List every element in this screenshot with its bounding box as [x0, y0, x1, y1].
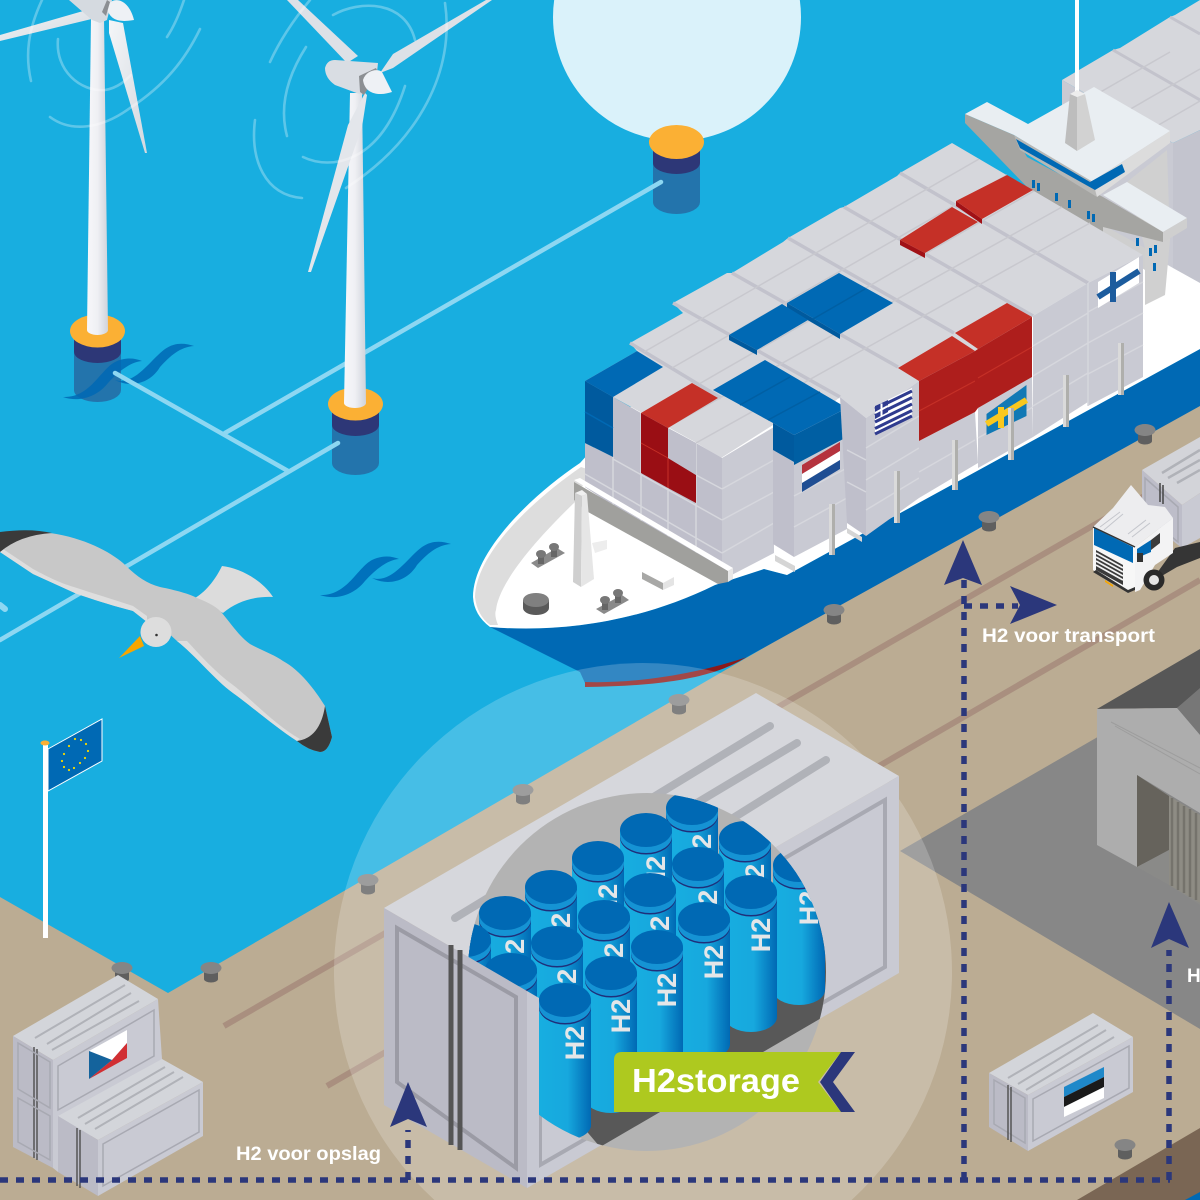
turbine foundations	[70, 125, 704, 475]
hydrogen cylinders: H2	[593, 884, 623, 918]
Finnish flag towers	[1033, 255, 1143, 437]
front tower group	[585, 351, 774, 580]
flag: Greece	[875, 388, 912, 435]
waves near ship	[320, 542, 451, 597]
stars	[61, 738, 89, 771]
hydrogen cylinders: H2	[699, 945, 729, 979]
hydrogen cylinders: H2	[746, 918, 776, 952]
hydrogen cylinders: H2	[687, 834, 717, 868]
red column	[641, 383, 718, 428]
foundation 1	[70, 314, 125, 402]
flag: Sweden	[986, 385, 1026, 435]
hydrogen cylinders	[439, 791, 825, 1140]
hydrogen cylinders: H2	[546, 913, 576, 947]
tail	[195, 566, 273, 613]
rotor	[287, 0, 492, 272]
rotor	[0, 0, 147, 153]
blue cap	[713, 360, 847, 435]
arrow: to truck	[1010, 586, 1057, 624]
eye	[155, 634, 158, 636]
roof	[1097, 649, 1200, 709]
bow mast	[573, 490, 594, 587]
gable wall	[1097, 708, 1200, 867]
flag: Finland	[1098, 257, 1139, 308]
grey road area	[900, 678, 1200, 1029]
waves near turbine	[63, 344, 194, 399]
radar mast	[1065, 0, 1095, 151]
trailer	[1142, 437, 1200, 548]
deck blocks	[592, 528, 862, 590]
container top	[384, 693, 899, 991]
wind turbine 2	[287, 0, 492, 408]
hydrogen cylinders: H2	[599, 943, 629, 977]
container right side	[527, 776, 899, 1188]
opening	[1137, 775, 1169, 867]
tower with Greek flag	[840, 381, 919, 536]
red containers on top	[900, 175, 1033, 258]
truck	[1093, 437, 1200, 593]
cargo top surface	[585, 143, 1143, 458]
keel red	[585, 657, 747, 687]
windshield	[1094, 528, 1133, 563]
deck white	[473, 200, 1200, 629]
wing tips	[0, 530, 52, 552]
arrow: up to transport	[944, 540, 982, 585]
container with Estonian flag	[989, 1013, 1133, 1151]
bridge roof	[965, 87, 1170, 182]
superstructure	[965, 0, 1187, 305]
arrow: to storage	[390, 1082, 427, 1127]
sun	[553, 0, 801, 141]
hydrogen cylinders: H2	[693, 890, 723, 924]
bridge wall	[1027, 157, 1103, 232]
flag: Czech Republic	[89, 1030, 127, 1079]
upper container	[13, 975, 162, 1172]
grille	[1096, 550, 1123, 585]
container door side	[384, 908, 539, 1188]
label: H2 voor opslag: H2 voor opslag	[236, 1144, 381, 1165]
flag cloth	[48, 719, 102, 791]
hydrogen cylinders: H2	[641, 856, 671, 890]
hydrogen cylinders: H2	[500, 939, 530, 973]
flagpole	[40, 740, 50, 938]
foundation 2	[328, 388, 383, 475]
undersea cables	[0, 182, 661, 640]
arrow: to warehouse	[1151, 902, 1189, 948]
dark ground corner	[1077, 1128, 1200, 1200]
blue containers on top	[729, 273, 893, 355]
tower	[344, 93, 366, 408]
container ship	[473, 0, 1200, 687]
cutaway interior	[468, 793, 826, 1151]
EU flag	[40, 719, 102, 938]
seagull	[0, 530, 332, 752]
flag: Netherlands	[802, 442, 840, 492]
blue column	[585, 351, 663, 397]
rail tracks	[224, 464, 1200, 1086]
quay bollards	[112, 424, 1156, 1160]
windows	[1032, 180, 1157, 271]
hydrogen cylinders: H2	[560, 1026, 590, 1060]
head	[140, 617, 172, 647]
wing undersides	[0, 547, 300, 741]
deck bollards	[523, 543, 629, 615]
label: H2 voor transport: H2 voor transport	[982, 626, 1156, 647]
chassis	[1157, 542, 1200, 577]
right wing	[1103, 197, 1163, 242]
tower	[87, 17, 108, 335]
stacked containers with Czech flag	[13, 975, 203, 1196]
hydrogen cylinders: H2	[740, 864, 770, 898]
red stacks and Swedish flag	[898, 303, 1033, 498]
bow rim	[475, 467, 590, 625]
hydrogen cylinders: H2	[552, 969, 582, 1003]
H2 storage container	[384, 693, 899, 1188]
H2storage label: H2storage	[632, 1062, 800, 1099]
hydrogen cylinders: H2	[794, 891, 824, 925]
highlight circle	[334, 663, 952, 1200]
hydrogen cylinders: H2	[652, 973, 682, 1007]
hull	[490, 349, 1200, 683]
tower with Dutch flag	[713, 360, 847, 557]
wind arcs	[28, 0, 447, 198]
lashing poles	[829, 343, 1124, 555]
wheel	[1144, 570, 1164, 590]
wind turbine 1	[0, 0, 147, 335]
blue stripe	[1016, 139, 1125, 190]
flow lines	[0, 580, 1170, 1180]
rear deck edge	[1165, 260, 1200, 281]
beak	[119, 636, 144, 658]
wings and body	[0, 533, 332, 752]
cab	[1093, 485, 1173, 593]
rear container stack	[1062, 0, 1200, 283]
hydrogen cylinders: H2	[645, 916, 675, 950]
breakwater wall	[574, 478, 733, 584]
warehouse building	[1097, 649, 1200, 905]
foundation 3	[649, 125, 704, 214]
lower container	[58, 1059, 203, 1196]
hydrogen cylinders: H2	[606, 999, 636, 1033]
flag: Estonia	[1064, 1067, 1104, 1117]
top ribs	[455, 726, 826, 918]
quay land	[0, 395, 1200, 1200]
H2storage label	[614, 1052, 855, 1112]
